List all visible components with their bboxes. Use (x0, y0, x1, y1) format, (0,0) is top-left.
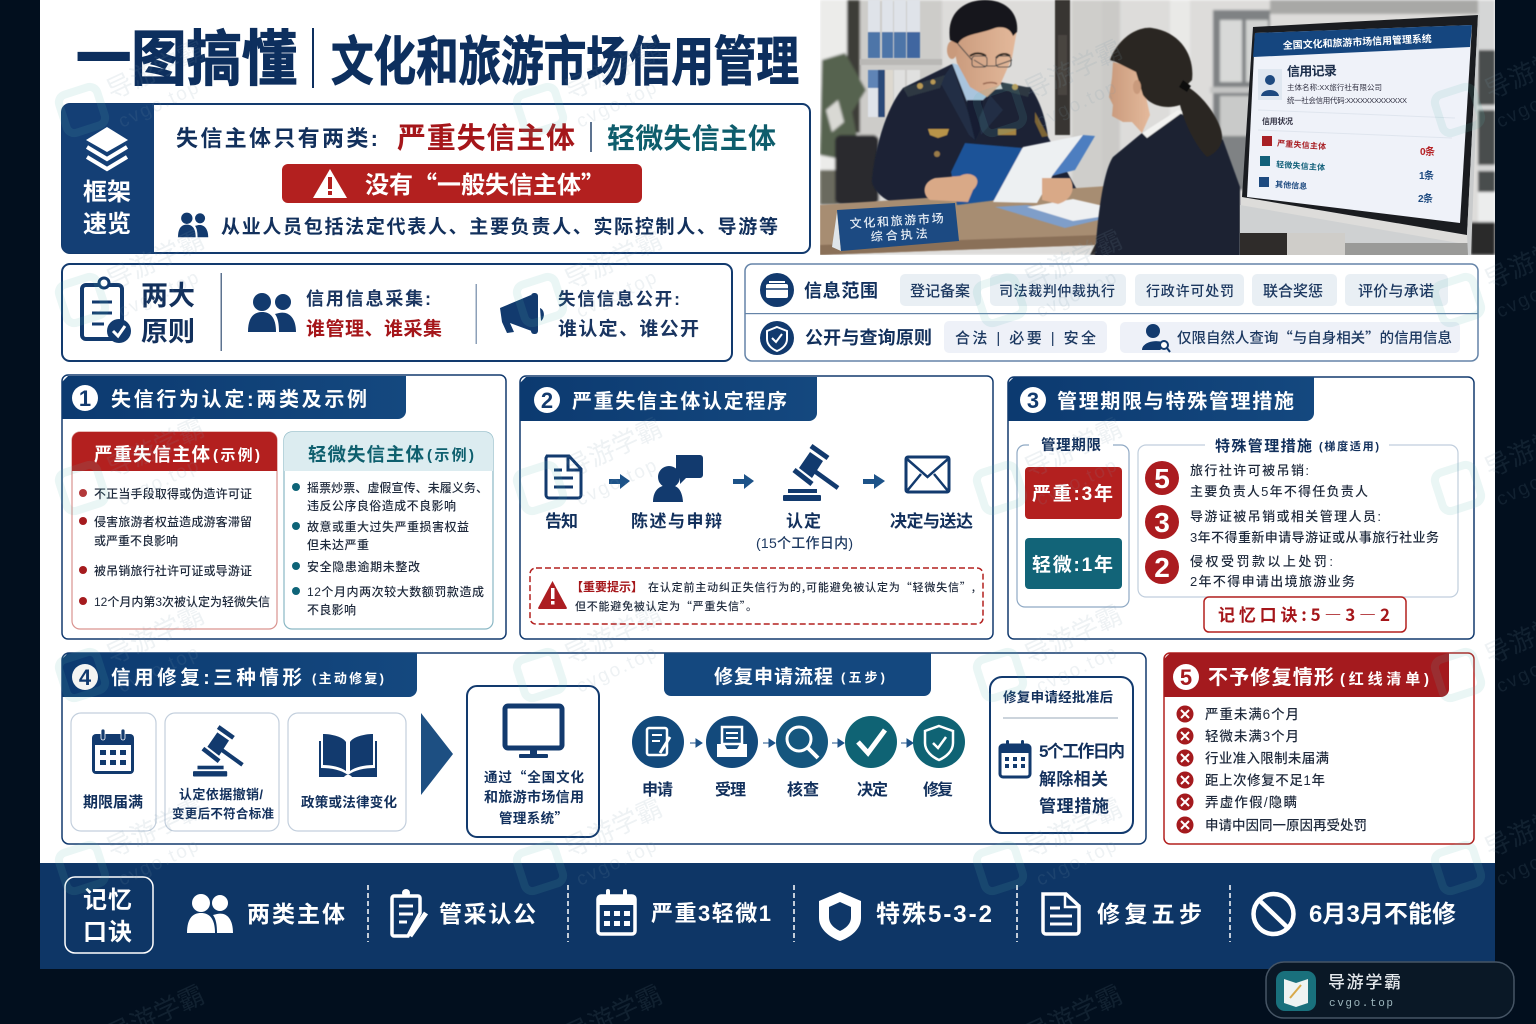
sub-panel: special measures: 2 (1154, 552, 1170, 583)
sub-panel: special measures: 2年不得申请出境旅游业务 (1190, 574, 1355, 589)
item: two subject types (187, 894, 345, 933)
mnemonic label: 记忆 (83, 887, 132, 914)
panel 1: dishonest behaviour (62, 375, 506, 639)
watermark layer: 导游学霸 (560, 599, 667, 670)
panel: framework overview (62, 104, 810, 253)
row: info scope: 行政许可处罚 (1146, 283, 1234, 299)
callout: no general subject: 没有“一般失信主体” (365, 165, 605, 200)
watermark layer: 导游学霸 (1020, 599, 1127, 670)
computer monitor: 全国文化和旅游市场信用管理系统 (1283, 32, 1432, 52)
card: national credit system: 通过“全国文化 (484, 766, 584, 786)
watermark layer: 导游学霸 (1020, 34, 1127, 105)
card: minor examples: 违反公序良俗造成不良影响 (307, 498, 456, 513)
card: national credit system: 管理系统” (499, 807, 568, 827)
watermark layer: cvgo.top (573, 266, 662, 323)
sub-panel: management period: 严重:3年 (1032, 482, 1113, 505)
computer monitor: 0条 (1420, 145, 1435, 158)
mnemonic label (65, 877, 153, 953)
step: apply (632, 716, 684, 799)
watermark layer: 导游学霸 (560, 792, 667, 863)
step: accept: 受理 (715, 780, 746, 799)
watermark layer: 导游学霸 (102, 792, 209, 863)
heading 1 (62, 376, 406, 419)
icon: megaphone (500, 293, 544, 334)
step: determination: 认定 (786, 511, 821, 531)
watermark layer: cvgo.top (1033, 454, 1122, 511)
arrow (690, 739, 702, 747)
card: minor examples: 安全隐患逾期未整改 (307, 559, 420, 574)
row: info scope: 联合奖惩 (1263, 283, 1323, 300)
panel: two principles (62, 264, 732, 361)
site badge (1266, 962, 1514, 1018)
computer monitor: 信用记录 (1287, 63, 1337, 79)
callout: 5-3-2 mnemonic (1204, 597, 1406, 632)
watermark layer: cvgo.top (573, 641, 662, 698)
sub-panel: management period (1017, 436, 1129, 607)
watermark layer: 导游学霸 (102, 34, 209, 105)
watermark layer: 导游学霸 (102, 412, 209, 483)
item: five repair steps (1043, 894, 1202, 934)
step: notice (545, 456, 581, 531)
card: after approval (990, 677, 1133, 833)
footer mnemonic bar (40, 863, 1495, 969)
desk (820, 186, 1112, 255)
card: severe examples: 或严重不良影响 (94, 533, 178, 548)
step: determination (756, 446, 853, 551)
computer monitor (1240, 15, 1480, 256)
computer monitor: 1条 (1419, 169, 1434, 182)
callout: important tip: 在认定前主动纠正失信行为的,可能避免被认定为“轻微失信”, (648, 579, 975, 595)
watermark layer: 导游学霸 (102, 224, 209, 295)
sub-panel: special measures: (梯度适用) (1319, 439, 1379, 453)
woman (1095, 28, 1240, 256)
card: after approval: 修复申请经批准后 (1003, 689, 1114, 705)
heading 5: 不予修复情形 (1208, 666, 1334, 689)
list: red-line items (1176, 706, 1367, 834)
principle: disclosure: 谁认定、谁公开 (558, 317, 699, 340)
arrow (863, 474, 885, 489)
heading 4: (主动修复) (312, 671, 384, 686)
heading: repair application flow (664, 653, 931, 696)
arrow (609, 474, 630, 489)
step: apply: 申请 (642, 780, 673, 799)
item: special 5-3-2: 特殊5-3-2 (876, 901, 992, 928)
sub-panel: special measures: 导游证被吊销或相关管理人员: (1190, 509, 1381, 524)
watermark layer: cvgo.top (573, 834, 662, 891)
watermark layer: 导游学霸 (1020, 792, 1127, 863)
computer monitor: 严重失信主体 (1277, 138, 1326, 151)
heading 3: 管理期限与特殊管理措施 (1057, 390, 1294, 413)
watermark layer: cvgo.top (1033, 834, 1122, 891)
list: red-line items: 申请中因同一原因再受处罚 (1205, 817, 1367, 833)
sub-panel: special measures: 5 (1154, 463, 1170, 494)
card: national credit system: 和旅游市场信用 (484, 789, 584, 805)
computer monitor: 轻微失信主体 (1276, 159, 1325, 172)
callout: important tip: 但不能避免被认定为“严重失信”。 (575, 598, 757, 614)
list: red-line items: 距上次修复不足1年 (1205, 772, 1325, 788)
heading 1: 1 (79, 386, 91, 411)
watermark layer: cvgo.top (1033, 76, 1122, 133)
watermark layer: 导游学霸 (1020, 224, 1127, 295)
sub-panel: special measures: 旅行社许可被吊销: (1190, 463, 1309, 478)
title: 文化和旅游市场信用管理 (331, 33, 799, 92)
step: repair: 修复 (923, 781, 953, 799)
headline: two subject types: 轻微失信主体 (607, 123, 776, 154)
sidebar: framework label (62, 104, 154, 253)
sub-panel: management period: 轻微:1年 (1032, 553, 1113, 576)
desk sign: 文化和旅游市场 (849, 210, 944, 231)
heading 5: (红线清单) (1340, 670, 1429, 688)
heading 4: 信用修复:三种情形 (111, 667, 302, 689)
watermark layer: cvgo.top (115, 76, 204, 133)
watermark layer: 导游学霸 (560, 34, 667, 105)
sidebar: framework label: 框架 (83, 179, 131, 206)
heading 5: 5 (1180, 665, 1192, 690)
principle: collection: 信用信息采集: (306, 288, 431, 309)
arrow (901, 739, 913, 747)
step: determination: (15个工作日内) (756, 535, 853, 551)
arrow to system (421, 713, 453, 795)
card: minor examples: 故意或重大过失严重损害权益 (307, 519, 469, 534)
step: decide: 决定 (857, 780, 888, 799)
desk sign (832, 203, 959, 251)
computer monitor: 主体名称:XX旅行社有限公司 (1287, 82, 1382, 92)
step: accept (706, 716, 758, 799)
row: disclosure and query rules: 公开与查询原则 (805, 328, 932, 348)
sub-panel: special measures: 侵权受罚款以上处罚: (1190, 554, 1333, 569)
heading 2: 严重失信主体认定程序 (572, 389, 787, 413)
panel 2: severe procedure (520, 376, 993, 639)
watermark layer: cvgo.top (115, 834, 204, 891)
card: national credit system (467, 686, 599, 837)
site badge: 导游学霸 (1328, 972, 1401, 992)
computer monitor: 信用状况 (1262, 116, 1293, 126)
row: info scope: 信息范围 (804, 280, 878, 301)
card: severe examples: 12个月内第3次被认定为轻微失信 (94, 594, 270, 609)
card: after approval: 管理措施 (1039, 796, 1109, 816)
card: severe examples: 不正当手段取得或伪造许可证 (94, 486, 252, 501)
headline: two subject types: 严重失信主体 (397, 122, 575, 155)
list: red-line items: 弄虚作假/隐瞒 (1205, 795, 1297, 810)
sub-panel: special measures: 3年不得重新申请导游证或从事旅行社业务 (1190, 530, 1439, 545)
step: verify (776, 716, 828, 799)
heading 1: 失信行为认定:两类及示例 (111, 387, 367, 411)
computer monitor: 统一社会信用代码:XXXXXXXXXXXXX (1287, 95, 1407, 105)
computer monitor: 2条 (1418, 192, 1433, 205)
watermark layer: cvgo.top (573, 76, 662, 133)
headline: two subject types (176, 122, 776, 155)
card: policy or law change: 政策或法律变化 (301, 794, 398, 810)
step: repair (913, 716, 965, 799)
heading 5 (1164, 653, 1449, 697)
open folder and papers (925, 135, 1108, 228)
watermark layer: 导游学霸 (1020, 412, 1127, 483)
principle: collection (306, 288, 442, 340)
item: five repair steps: 修复五步 (1097, 901, 1202, 927)
step: statement and defence (631, 455, 722, 531)
card: severe examples: 被吊销旅行社许可证或导游证 (94, 563, 252, 578)
item: severe three years minor one year (598, 889, 771, 934)
heading 4 (62, 653, 417, 697)
card: severe examples: (示例) (213, 447, 260, 464)
panel 4: credit repair (62, 653, 1146, 844)
item: special 5-3-2 (819, 892, 992, 941)
callout: 5-3-2 mnemonic: 记忆口诀:5—3—2 (1218, 601, 1390, 626)
row: info scope: 司法裁判仲裁执行 (999, 283, 1115, 299)
panel 5: non-repair situations (1164, 653, 1474, 844)
sidebar: framework label: 速览 (83, 211, 131, 238)
officer (872, 0, 1077, 205)
arrow (832, 739, 844, 747)
watermark layer: cvgo.top (115, 454, 204, 511)
watermark layer: cvgo.top (1033, 641, 1122, 698)
heading 3: 3 (1027, 388, 1039, 413)
practitioners note: 从业人员包括法定代表人、主要负责人、实际控制人、导游等 (221, 215, 778, 238)
card: minor examples: 摇票炒票、虚假宣传、未履义务、 (307, 480, 488, 495)
item: manage collect determine disclose: 管采认公 (439, 901, 536, 927)
sub-panel: special measures: 3 (1154, 507, 1170, 538)
list: red-line items: 轻微未满3个月 (1205, 728, 1299, 744)
watermark layer: cvgo.top (115, 266, 204, 323)
card: minor examples: 不良影响 (307, 602, 356, 617)
icon: people (248, 293, 296, 332)
arrow (763, 739, 775, 747)
watermark layer: cvgo.top (115, 641, 204, 698)
heading 4: 4 (79, 665, 92, 690)
callout: important tip (530, 568, 983, 624)
row: info scope: 评价与承诺 (1358, 283, 1434, 300)
principle: disclosure (558, 289, 699, 340)
card: period expired: 期限届满 (83, 793, 143, 811)
computer monitor: 其他信息 (1275, 179, 1307, 191)
card: period expired (71, 713, 156, 831)
step: decision and delivery (890, 457, 973, 531)
card: basis revoked: 变更后不符合标准 (172, 806, 274, 821)
card: after approval: 5个工作日内 (1039, 742, 1125, 761)
item: two subject types: 两类主体 (247, 901, 345, 927)
step: decision and delivery: 决定与送达 (890, 511, 973, 531)
watermark layer: 导游学霸 (560, 412, 667, 483)
item: six months three months cannot repair (1254, 894, 1456, 934)
card: minor examples: (示例) (427, 447, 474, 464)
heading: two principles: 两大 (141, 281, 195, 311)
row: disclosure and query rules: 仅限自然人查询“与自身相关”的信用信息 (1177, 327, 1452, 348)
site badge: cvgo.top (1329, 998, 1393, 1010)
callout: important tip: 【重要提示】 (571, 578, 643, 595)
panel: info scope and disclosure rules (745, 264, 1478, 361)
icon: clipboard check (82, 278, 131, 343)
heading: two principles: 原则 (141, 317, 195, 347)
desk sign: 综合执法 (870, 226, 928, 244)
hero photo: law enforcement officer and visitor at a credit system monitor (820, 0, 1495, 256)
card: severe examples: 侵害旅游者权益造成游客滞留 (94, 514, 252, 529)
heading: repair application flow: 修复申请流程 (714, 666, 833, 688)
sub-panel: special measures (1138, 437, 1458, 597)
sub-panel: management period: 管理期限 (1041, 436, 1102, 454)
panel 3: management period and special measures (1008, 377, 1474, 639)
list: red-line items: 严重未满6个月 (1205, 706, 1299, 722)
heading: two principles (141, 281, 195, 347)
step: notice: 告知 (545, 512, 578, 531)
card: minor examples: 12个月内两次较大数额罚款造成 (307, 584, 484, 599)
step: decide (845, 716, 897, 799)
arrow (733, 474, 754, 489)
sub-panel: special measures: 特殊管理措施 (1215, 437, 1312, 455)
icon: badge logo (1276, 971, 1316, 1011)
callout: no general subject (282, 164, 642, 203)
watermark layer: cvgo.top (573, 454, 662, 511)
row: disclosure and query rules (760, 321, 1460, 355)
row: disclosure and query rules: 合法 | 必要 | 安全 (955, 329, 1096, 347)
card: basis revoked (165, 713, 279, 831)
title: 一图搞懂 (76, 26, 297, 93)
mnemonic label: 口诀 (83, 919, 132, 946)
principle: collection: 谁管理、谁采集 (306, 317, 442, 340)
heading 2 (520, 377, 817, 421)
heading: repair application flow: (五步) (841, 670, 885, 685)
title (76, 26, 799, 93)
heading 2: 2 (541, 388, 553, 413)
card: minor examples: 但未达严重 (307, 537, 369, 552)
card: after approval: 解除相关 (1039, 769, 1108, 789)
item: manage collect determine disclose (392, 889, 536, 936)
row: info scope (760, 273, 1448, 307)
principle: disclosure: 失信信息公开: (558, 289, 680, 309)
step: verify: 核查 (787, 780, 819, 799)
watermark layer: 导游学霸 (102, 599, 209, 670)
card: minor examples (284, 432, 493, 629)
item: severe three years minor one year: 严重3轻微1 (651, 901, 771, 926)
sub-panel: special measures: 主要负责人5年不得任负责人 (1190, 484, 1368, 499)
card: severe examples: 严重失信主体 (94, 444, 210, 465)
headline: two subject types: 失信主体只有两类: (176, 126, 378, 151)
step: statement and defence: 陈述与申辩 (631, 511, 722, 531)
card: severe examples (72, 432, 277, 629)
card: minor examples: 轻微失信主体 (308, 444, 424, 465)
heading 3 (1008, 377, 1314, 421)
card: policy or law change (288, 713, 406, 831)
watermark layer: cvgo.top (1033, 266, 1122, 323)
card: basis revoked: 认定依据撤销/ (179, 787, 263, 802)
item: six months three months cannot repair: 6月3月不能修 (1309, 901, 1456, 928)
list: red-line items: 行业准入限制未届满 (1205, 750, 1329, 766)
row: info scope: 登记备案 (910, 282, 970, 300)
watermark layer: 导游学霸 (560, 224, 667, 295)
